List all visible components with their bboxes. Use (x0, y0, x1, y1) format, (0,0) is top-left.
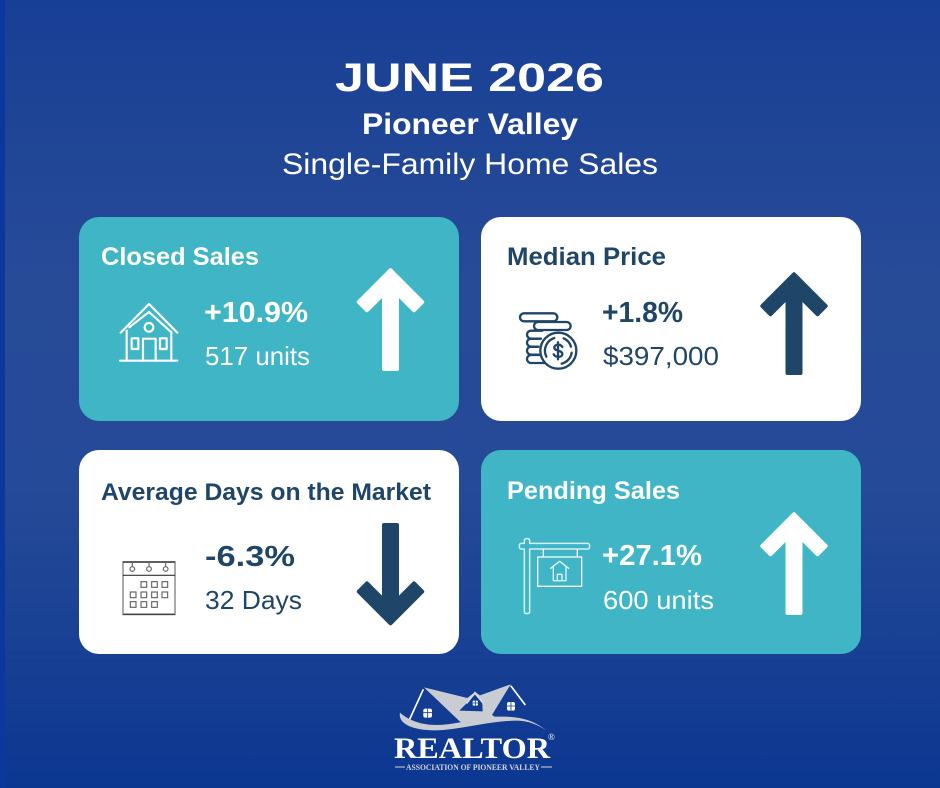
panel: median price (481, 217, 861, 421)
value: closed sales: 517 units (205, 341, 310, 371)
icon: house for sale sign (519, 539, 590, 614)
heading: median price: Median Price (507, 243, 666, 271)
arrow: up (762, 274, 826, 373)
arrow: down (359, 525, 422, 623)
arrow: up (762, 514, 826, 613)
subtitle: region: Pioneer Valley (362, 108, 578, 141)
heading: closed sales: Closed Sales (101, 243, 259, 271)
change: average days: -6.3% (205, 541, 295, 573)
change: closed sales: +10.9% (204, 297, 308, 329)
title: month and year: JUNE 2026 (335, 56, 604, 100)
panel: closed sales (79, 217, 459, 421)
logo: realtor association of pioneer valley (394, 684, 555, 772)
value: pending sales: 600 units (603, 585, 714, 615)
heading: average days on the market: Average Days on the Market (101, 479, 431, 506)
logo wordmark: REALTOR (394, 732, 550, 765)
icon: coin stack (520, 313, 576, 369)
heading: pending sales: Pending Sales (507, 477, 680, 505)
panel: average days on the market (79, 450, 459, 654)
panel: pending sales (481, 450, 861, 654)
value: average days: 32 Days (205, 585, 302, 615)
logo mark: rooftops and swoosh (400, 684, 547, 731)
title block (282, 56, 658, 181)
value: median price: $397,000 (603, 341, 719, 371)
icon: calendar (123, 562, 175, 614)
change: median price: +1.8% (602, 297, 683, 329)
icon: house (120, 304, 177, 361)
change: pending sales: +27.1% (602, 540, 702, 572)
arrow: up (359, 270, 422, 369)
registered mark: ® (548, 732, 555, 742)
subtitle: market segment: Single-Family Home Sales (282, 148, 658, 181)
logo tagline: ASSOCIATION OF PIONEER VALLEY (406, 763, 540, 772)
